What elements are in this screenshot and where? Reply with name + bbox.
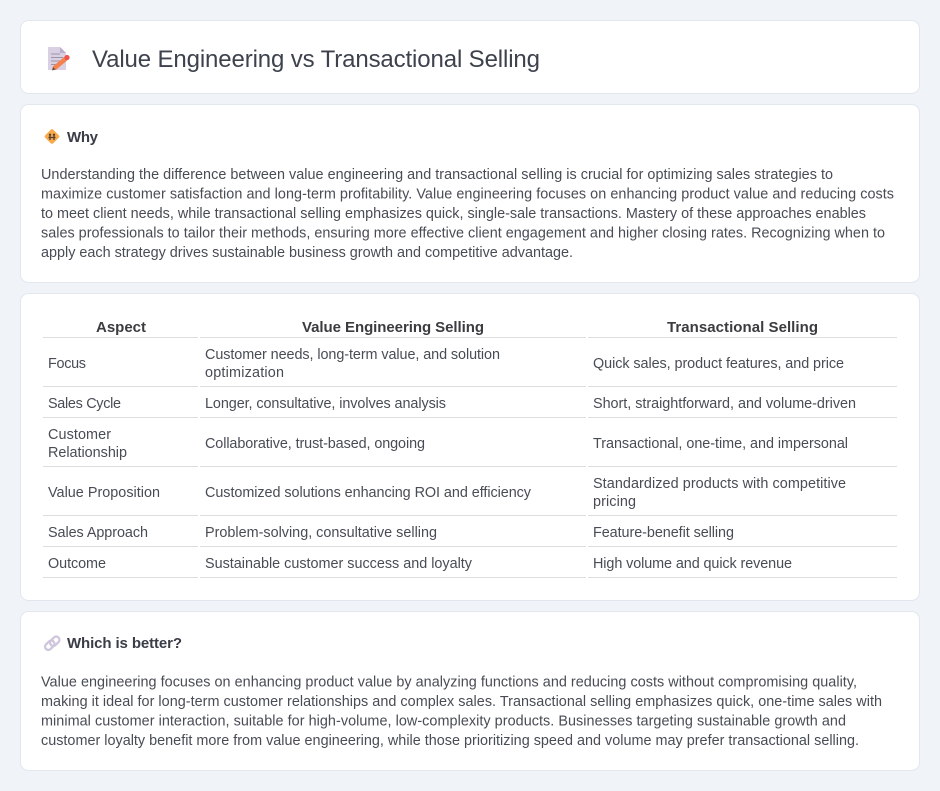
text block: which paragraph: minimal customer interaction, suitable for high-volume, low-complexity products. Businesses targeting sustainable growth and — [41, 714, 846, 730]
table row: value proposition: Standardized products with competitive — [593, 476, 846, 492]
table row: outcome: Outcome — [48, 556, 106, 572]
table row: value proposition: pricing — [593, 494, 636, 510]
table header row: Aspect — [96, 319, 146, 336]
panel: why — [20, 104, 920, 282]
table row: customer relationship: Customer — [48, 427, 111, 443]
table header row — [96, 319, 818, 336]
table row: value proposition: Value Proposition — [48, 485, 160, 501]
text block: why paragraph: Understanding the difference between value engineering and transactional selling is crucial for optimizing sales strategies to — [41, 167, 833, 183]
text block: why paragraph: sales professionals to tailor their methods, ensuring more effective client engagement and higher closing rates. Recognizing when to — [41, 226, 885, 242]
table row: outcome — [48, 556, 792, 572]
table row: sales cycle: Sales Cycle — [48, 396, 121, 412]
table row: focus: optimization — [205, 365, 284, 381]
table row: sales approach: Problem-solving, consultative selling — [205, 525, 437, 541]
icon: chain link — [44, 635, 61, 651]
text block: why paragraph: to meet client needs, while transactional selling emphasizes quick, single-sale transactions. Mastery of these approaches enables — [41, 206, 866, 222]
text block: which paragraph: customer loyalty benefit more from value engineering, while those prioritizing speed and volume may prefer transactional selling. — [41, 733, 859, 749]
table row: sales approach — [48, 525, 734, 541]
table row: customer relationship — [48, 427, 848, 461]
table row: sales approach: Feature-benefit selling — [593, 525, 734, 541]
table row: customer relationship: Collaborative, trust-based, ongoing — [205, 436, 425, 452]
table row: customer relationship: Relationship — [48, 445, 127, 461]
table row: sales cycle: Short, straightforward, and volume-driven — [593, 396, 856, 412]
table row: focus: Quick sales, product features, and price — [593, 356, 844, 372]
text block: why paragraph — [41, 167, 894, 261]
table header row: Transactional Selling — [667, 319, 818, 336]
table row: focus: Focus — [48, 356, 86, 372]
panel: which is better — [20, 612, 920, 770]
panel: title header — [20, 20, 920, 94]
table row: value proposition — [48, 476, 846, 510]
icon: warning diamond — [44, 128, 60, 145]
table row: focus — [48, 347, 844, 381]
table row: sales cycle — [48, 396, 856, 412]
table row: outcome: Sustainable customer success and loyalty — [205, 556, 473, 572]
text block: why paragraph: maximize customer satisfaction and long-term profitability. Value engineering focuses on enhancing product value and reducing costs — [41, 186, 894, 202]
text block: which paragraph — [41, 674, 882, 749]
table row: focus: Customer needs, long-term value, and solution — [205, 347, 500, 363]
text block: which paragraph: Value engineering focuses on enhancing product value by analyzing functions and reducing costs without compromising quality, — [41, 674, 857, 690]
icon: document with pencil — [48, 47, 70, 70]
table row: customer relationship: Transactional, one-time, and impersonal — [593, 436, 848, 452]
table row: sales approach: Sales Approach — [48, 525, 148, 541]
table row: outcome: High volume and quick revenue — [593, 556, 792, 572]
table row: value proposition: Customized solutions enhancing ROI and efficiency — [205, 485, 532, 501]
panel: comparison table — [20, 294, 920, 600]
heading: which is better: Which is better? — [67, 635, 182, 652]
text block: which paragraph: making it ideal for long-term customer relationships and complex sales. Transactional selling emphasizes quick, one-time sales with — [41, 694, 882, 710]
text block: why paragraph: apply each strategy drives sustainable business growth and competitive advantage. — [41, 245, 573, 261]
table row: sales cycle: Longer, consultative, involves analysis — [205, 396, 446, 412]
table header row: Value Engineering Selling — [302, 319, 484, 336]
title: Value Engineering vs Transactional Selling — [92, 46, 540, 73]
heading: why: Why — [67, 129, 99, 146]
